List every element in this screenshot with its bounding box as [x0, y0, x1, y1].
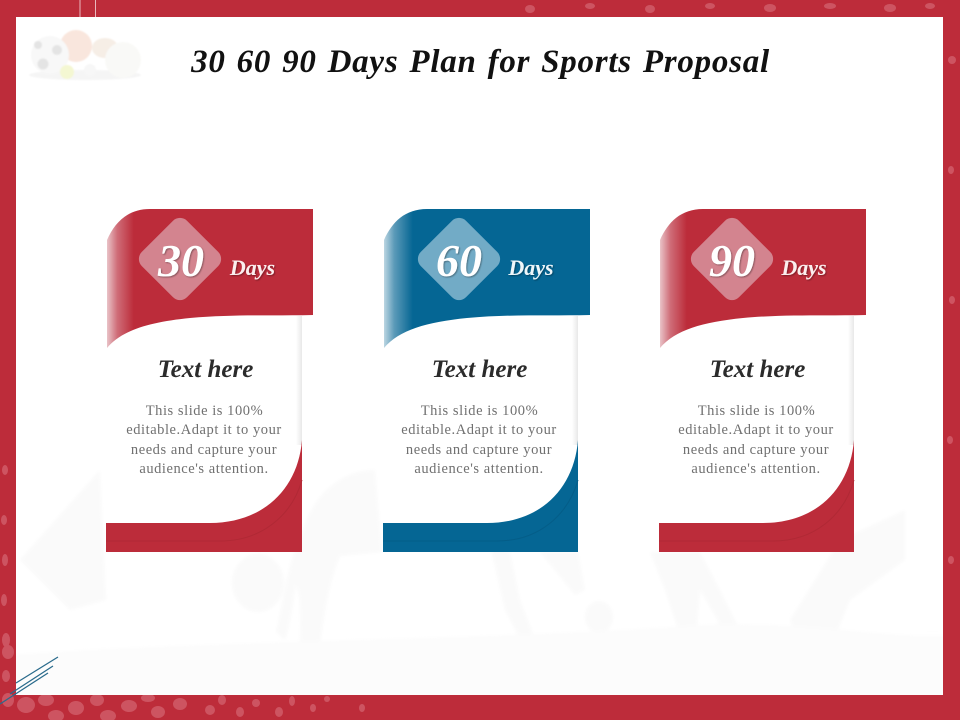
background: faded athlete silhouettes	[10, 470, 950, 705]
card body text	[678, 403, 834, 477]
card body	[383, 240, 578, 552]
card body text: needs and capture your	[406, 442, 552, 458]
diamond badge	[687, 214, 777, 304]
hanging strings	[80, 0, 96, 17]
card body text: This slide is 100%	[146, 403, 263, 419]
diamond badge	[135, 214, 225, 304]
card body text: This slide is 100%	[421, 403, 538, 419]
bottom wave	[106, 440, 302, 552]
days label: Days	[780, 255, 827, 280]
card body text: editable.Adapt it to your	[126, 422, 282, 438]
panel: 60 days	[383, 209, 590, 552]
number: 30	[157, 235, 204, 286]
header ribbon	[107, 209, 313, 348]
panel: 30 days	[106, 209, 313, 552]
number: 60	[436, 235, 482, 286]
card heading: Text here	[710, 356, 805, 383]
days label: Days	[229, 255, 275, 280]
card body text: audience's attention.	[139, 461, 269, 477]
decorative diagonal lines	[0, 657, 58, 704]
icon: sports balls	[29, 30, 141, 80]
card body text: This slide is 100%	[698, 403, 815, 419]
card body text: editable.Adapt it to your	[678, 422, 834, 438]
bottom wave	[383, 440, 578, 552]
number: 90	[709, 235, 755, 286]
card heading: Text here	[158, 356, 253, 383]
card body	[659, 240, 854, 552]
card heading: Text here	[432, 356, 527, 383]
header ribbon	[660, 209, 866, 348]
card body text	[401, 403, 557, 477]
bottom wave	[659, 440, 854, 552]
card body text: needs and capture your	[683, 442, 829, 458]
card body text: editable.Adapt it to your	[401, 422, 557, 438]
header ribbon	[384, 209, 590, 348]
card body text: needs and capture your	[131, 442, 277, 458]
diamond badge	[414, 214, 504, 304]
card body text: audience's attention.	[414, 461, 544, 477]
title: 30 60 90 Days Plan for Sports Proposal	[190, 44, 770, 80]
panel: 90 days	[659, 209, 866, 552]
card body text: audience's attention.	[691, 461, 821, 477]
card body	[106, 240, 302, 552]
days label: Days	[507, 255, 554, 280]
card body text	[126, 403, 282, 477]
